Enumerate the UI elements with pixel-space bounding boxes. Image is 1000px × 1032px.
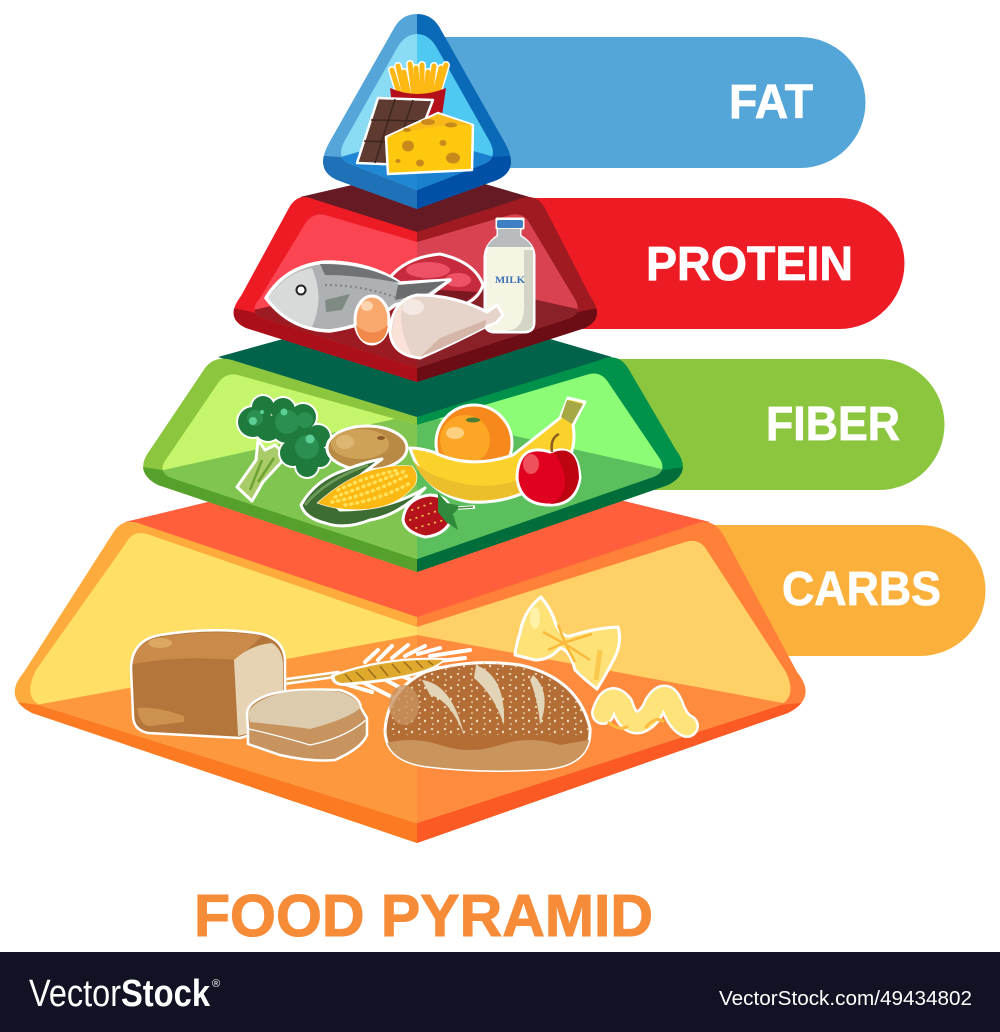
food: fiber bbox=[236, 394, 585, 537]
corn bbox=[301, 459, 425, 526]
banana bbox=[410, 398, 585, 502]
title: FOOD PYRAMID bbox=[194, 883, 653, 949]
band: fiber bbox=[600, 359, 944, 490]
fish bbox=[266, 262, 450, 331]
fries bbox=[390, 64, 446, 122]
pyramid tier: carbs bbox=[0, 500, 834, 860]
loaf of bread bbox=[131, 630, 285, 738]
band labels bbox=[646, 76, 941, 616]
band: fat bbox=[430, 37, 866, 168]
pyramid tier: fiber bbox=[130, 339, 704, 580]
carbs top face bbox=[125, 500, 710, 620]
category bands bbox=[430, 37, 986, 656]
pyramid tier: protein bbox=[234, 184, 597, 382]
milk bottle bbox=[485, 219, 534, 332]
meat bbox=[385, 254, 483, 305]
milk label: MILK bbox=[495, 275, 525, 285]
bow-tie pasta bbox=[515, 597, 620, 689]
chocolate bar bbox=[357, 98, 433, 165]
registered mark: ® bbox=[212, 978, 220, 990]
footer bar bbox=[0, 952, 1000, 1032]
carbs inner faces bbox=[30, 533, 790, 823]
round bread bbox=[380, 660, 600, 775]
chicken leg bbox=[390, 295, 503, 358]
orange bbox=[436, 405, 512, 481]
pyramid tier: fat bbox=[323, 14, 511, 209]
footer url: VectorStock.com/49434802 bbox=[719, 988, 972, 1010]
food: protein bbox=[266, 219, 534, 358]
label: fat: FAT bbox=[729, 76, 813, 129]
protein rim bbox=[234, 197, 597, 382]
carbs rim bbox=[14, 522, 806, 843]
food: fat bbox=[357, 64, 473, 174]
protein inner faces bbox=[254, 214, 578, 368]
fiber top face bbox=[218, 339, 612, 420]
logo: VectorStock bbox=[29, 973, 211, 1015]
fat inner faces bbox=[341, 34, 493, 190]
protein top face bbox=[300, 184, 533, 235]
cheese wedge bbox=[386, 113, 473, 174]
potato bbox=[327, 426, 407, 470]
fat rim bbox=[323, 14, 511, 209]
bread slices bbox=[247, 690, 367, 760]
food: carbs bbox=[131, 597, 687, 775]
label: carbs: CARBS bbox=[782, 563, 941, 616]
label: protein: PROTEIN bbox=[646, 238, 853, 291]
wheat bbox=[282, 645, 470, 697]
wavy pasta bbox=[603, 696, 687, 728]
fiber rim bbox=[143, 357, 683, 572]
broccoli bbox=[236, 394, 332, 501]
egg bbox=[355, 296, 389, 344]
fiber inner faces bbox=[162, 374, 662, 559]
band: carbs bbox=[700, 525, 986, 656]
apple bbox=[517, 434, 580, 505]
strawberry bbox=[403, 493, 475, 537]
bread slashes bbox=[422, 680, 464, 735]
band: protein bbox=[500, 198, 904, 329]
label: fiber: FIBER bbox=[766, 398, 900, 451]
